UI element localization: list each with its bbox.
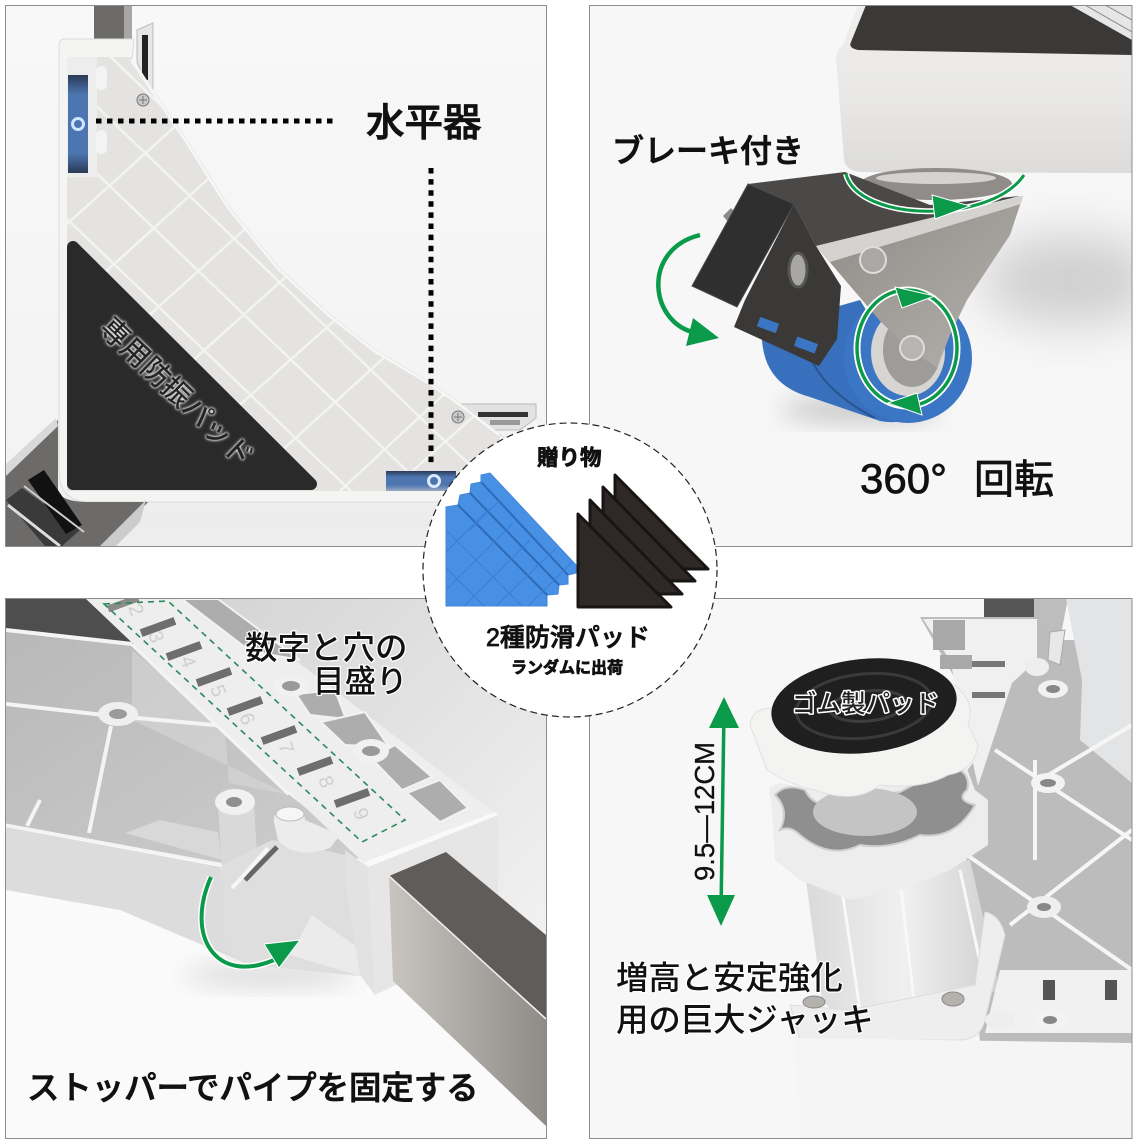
pipe top bbox=[984, 598, 1068, 650]
hinge bbox=[789, 253, 807, 287]
wheel seam bbox=[812, 362, 876, 419]
end cube bbox=[345, 812, 498, 995]
white foot block bbox=[793, 1038, 1132, 1138]
side tab top bbox=[137, 23, 153, 100]
axle detail bbox=[723, 208, 733, 221]
panel: giant jack with rubber pad bbox=[590, 598, 1132, 1138]
stopper latch bbox=[222, 807, 360, 976]
green arrow: stopper bbox=[202, 877, 300, 968]
label: height range: 9.5—12CM bbox=[689, 742, 720, 881]
white leg body bbox=[836, 5, 1132, 173]
dark upper part bbox=[6, 599, 133, 644]
top plate of caster bbox=[748, 172, 1020, 246]
brake lever plate bbox=[734, 204, 841, 366]
rib bosses bbox=[1027, 773, 1065, 918]
spirit level horizontal bbox=[386, 471, 456, 491]
rivet lower bbox=[900, 336, 924, 360]
lower bosses bbox=[985, 1009, 1067, 1031]
black anti-vibration pad bbox=[73, 247, 311, 484]
green dashed scale outline bbox=[104, 601, 405, 842]
label: number scale: 数字と穴の bbox=[245, 622, 408, 669]
grey ribbed cavity bbox=[6, 630, 370, 865]
label: level: 水平器 bbox=[366, 92, 482, 148]
lower white band bbox=[985, 970, 1132, 1033]
wheel hub bbox=[871, 322, 945, 396]
black foot pad bbox=[850, 5, 1132, 55]
base screws bbox=[803, 992, 964, 1008]
label: gift: 贈り物 bbox=[537, 441, 602, 472]
scale numbers: 9 bbox=[348, 805, 373, 823]
scale numbers: 3 bbox=[143, 628, 168, 646]
side tab right bbox=[461, 404, 536, 430]
scale numbers: 4 bbox=[175, 653, 200, 671]
scale numbers: 8 bbox=[313, 773, 338, 791]
scale numbers: 5 bbox=[205, 682, 230, 700]
rubber pad bbox=[767, 650, 961, 762]
upper knob bbox=[750, 668, 978, 796]
bracket grey structure bbox=[920, 617, 1132, 1043]
right cells bbox=[182, 599, 468, 822]
bracket frame bbox=[59, 39, 540, 502]
adjacent pipe mechanism bottom-left bbox=[6, 418, 148, 546]
gift circle bbox=[423, 423, 717, 717]
panel: level gauges and anti-vibration pad bbox=[6, 6, 546, 546]
chrome stem bbox=[860, 168, 1012, 200]
brake pedal bbox=[692, 184, 794, 307]
screws bbox=[137, 94, 464, 423]
cavity boss bbox=[98, 702, 138, 726]
stopper post bbox=[215, 789, 258, 870]
front blue wheel bbox=[870, 312, 972, 423]
label: jack line 1: 増高と安定強化 bbox=[616, 952, 843, 999]
metal pipe top bbox=[94, 5, 132, 41]
label: rubber pad: ゴム製パッド bbox=[792, 685, 939, 720]
label: with brake: ブレーキ付き bbox=[612, 126, 804, 172]
spirit level vertical bbox=[68, 75, 88, 173]
label: fix pipe with stopper: ストッパーでパイプを固定する bbox=[27, 1062, 479, 1109]
lower knob bbox=[769, 750, 988, 900]
label: number scale line 2: 目盛り bbox=[313, 656, 408, 702]
top right tab bbox=[1025, 630, 1068, 698]
blue wheels body bbox=[762, 300, 897, 422]
scale numbers: 2 bbox=[123, 601, 148, 619]
blue anti-slip pad bbox=[446, 473, 576, 606]
cavity ribs bbox=[6, 630, 289, 833]
label: 360 rotation: 回転 bbox=[974, 458, 1054, 502]
green double arrow bbox=[707, 697, 739, 926]
label: 360 rotation: 360° bbox=[860, 455, 947, 502]
green arrow: stem rotation bbox=[846, 174, 1024, 219]
panel: stopper and scale bbox=[6, 595, 546, 1138]
steel fork bbox=[816, 196, 1023, 368]
green arrow: wheel rotation bbox=[857, 287, 957, 415]
dotted leader vertical bbox=[428, 168, 434, 463]
label: jack line 2: 用の巨大ジャッキ bbox=[616, 994, 874, 1041]
dotted leader horizontal bbox=[96, 118, 335, 124]
scale numbers bbox=[123, 601, 373, 823]
square pipe bbox=[389, 852, 546, 1126]
label: random shipping: ランダムに出荷 bbox=[511, 654, 623, 678]
dark anti-slip pads bbox=[578, 475, 708, 607]
white scale band bbox=[85, 598, 498, 867]
ribs bbox=[967, 725, 1132, 970]
pad label: 専用防振パッド bbox=[92, 307, 264, 475]
panel: caster wheel with brake bbox=[615, 6, 1132, 498]
rivet upper bbox=[860, 247, 886, 273]
scale numbers: 6 bbox=[234, 710, 259, 728]
scale bosses bbox=[273, 675, 389, 763]
green arrow: brake bbox=[658, 235, 719, 346]
jack base plate bbox=[790, 912, 1005, 1040]
label: two anti-slip pads: 2種防滑パッド bbox=[486, 624, 650, 652]
front rail bbox=[6, 827, 250, 965]
jack body bbox=[806, 860, 1000, 1030]
bracket top white band bbox=[923, 619, 1037, 786]
scale slots bbox=[107, 595, 370, 808]
scale numbers: 7 bbox=[273, 739, 298, 757]
bracket inner ribs bbox=[67, 57, 500, 491]
cavity shades bbox=[125, 650, 290, 860]
